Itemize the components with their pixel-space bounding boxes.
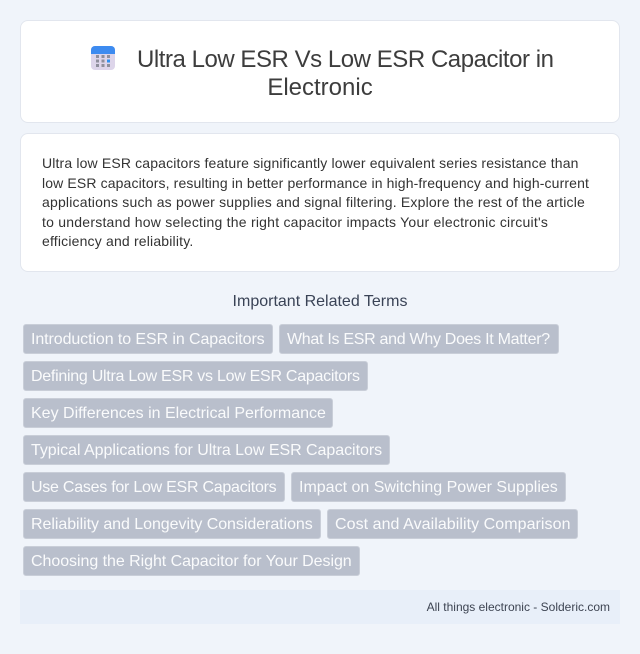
title line 2: Electronic [267, 74, 373, 101]
tag [23, 509, 321, 539]
title line 1: Ultra Low ESR Vs Low ESR Capacitor in [137, 46, 553, 73]
description text: low ESR capacitors, resulting in better performance in high-frequency and high-current [42, 175, 589, 191]
description text: applications such as power supplies and signal filtering. Explore the rest of the article [42, 194, 585, 210]
panel: related term tags [23, 324, 578, 576]
description text: to understand how selecting the right capacitor impacts Your electronic circuit's [42, 214, 548, 230]
tag: Cost and Availability Comparison [335, 516, 571, 533]
tag: What Is ESR and Why Does It Matter? [287, 331, 550, 348]
tag [23, 398, 333, 428]
icon: calendar [91, 46, 115, 70]
tag [279, 324, 559, 354]
tag [23, 435, 390, 465]
tag [23, 361, 368, 391]
tag: Impact on Switching Power Supplies [299, 479, 558, 496]
tag: Typical Applications for Ultra Low ESR Capacitors [31, 442, 382, 459]
footer text: All things electronic - Solderic.com [427, 600, 610, 614]
footer bar [20, 590, 620, 624]
panel: description card [20, 133, 620, 272]
tag [23, 472, 285, 502]
tag [23, 324, 273, 354]
tag [23, 546, 360, 576]
tag: Choosing the Right Capacitor for Your Design [31, 553, 352, 570]
description text: Ultra low ESR capacitors feature significantly lower equivalent series resistance than [42, 155, 579, 171]
tag: Key Differences in Electrical Performance [31, 405, 326, 422]
heading: important related terms: Important Related Terms [233, 293, 407, 310]
tag: Introduction to ESR in Capacitors [31, 331, 265, 348]
tag [327, 509, 578, 539]
tag: Reliability and Longevity Considerations [31, 516, 313, 533]
tag [291, 472, 566, 502]
tag: Use Cases for Low ESR Capacitors [31, 479, 276, 496]
description text: efficiency and reliability. [42, 233, 193, 249]
tag: Defining Ultra Low ESR vs Low ESR Capacitors [31, 368, 360, 385]
description text [42, 155, 589, 249]
panel: title card [20, 20, 620, 123]
